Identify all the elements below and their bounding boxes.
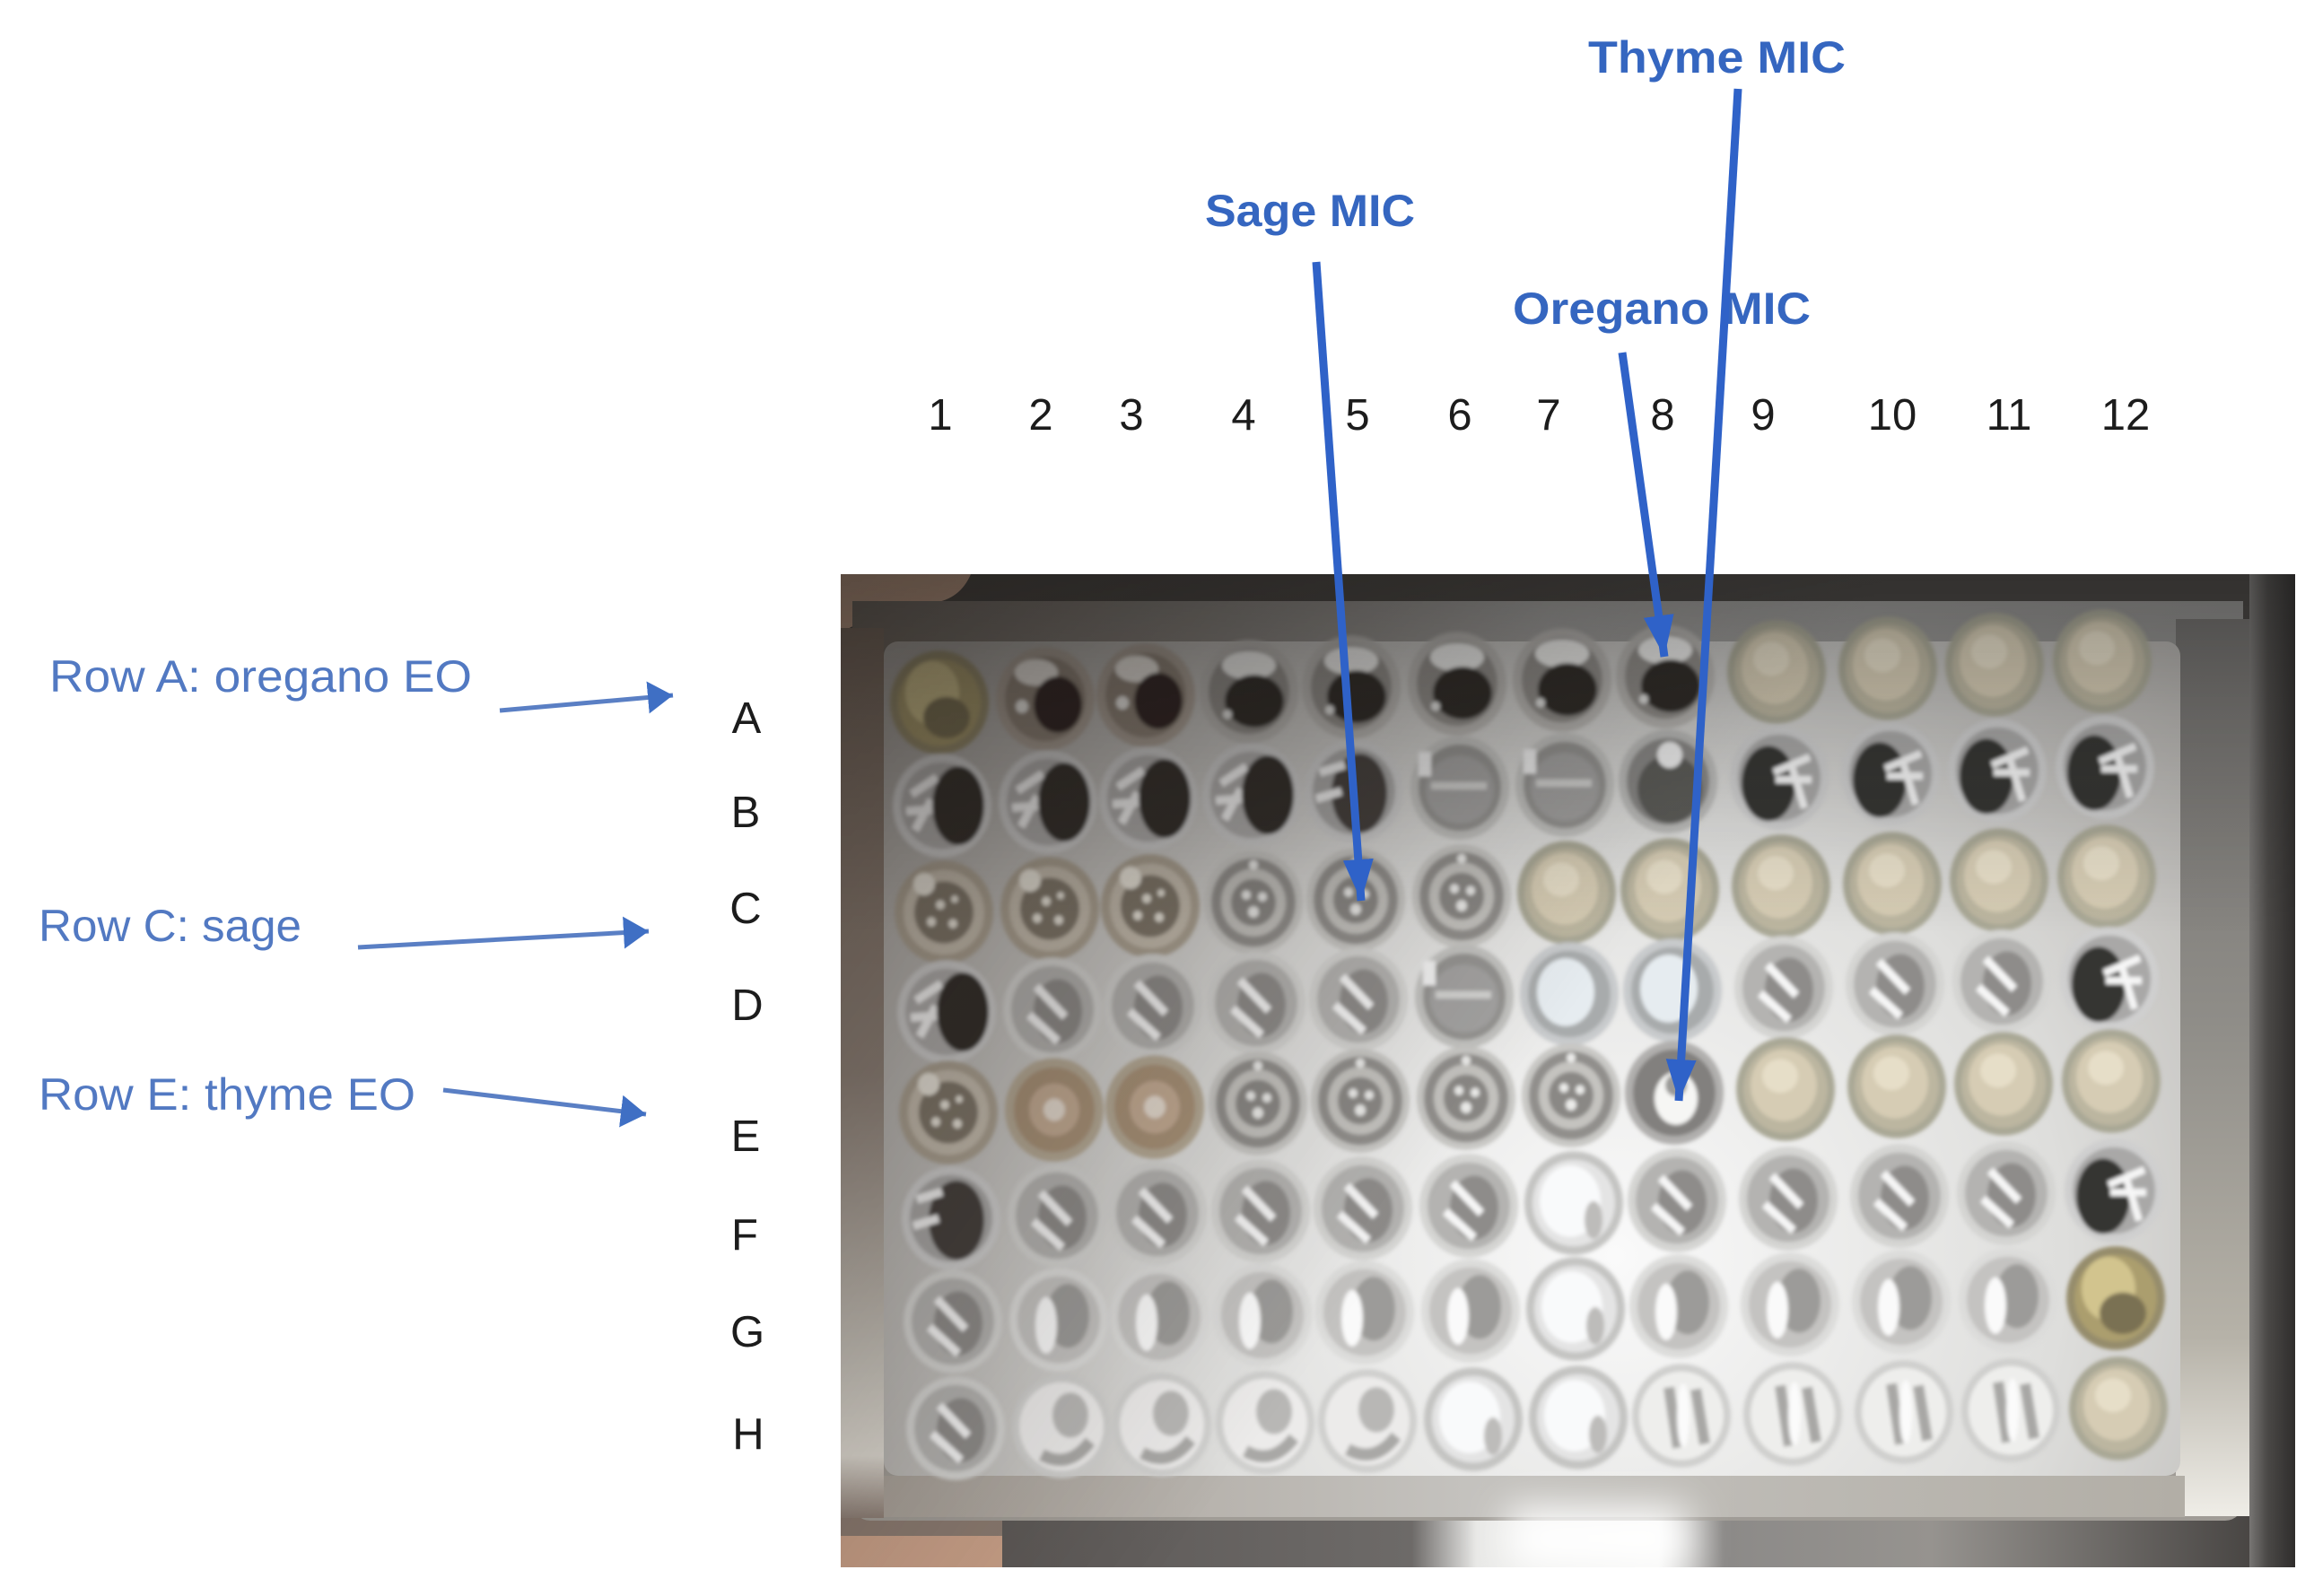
row C wells: sage <box>895 824 2156 964</box>
row G wells <box>904 1246 2165 1374</box>
column numbers 1 to 12: 7 <box>1536 391 1561 440</box>
column numbers 1 to 12: 2 <box>1028 391 1053 440</box>
row letters A to H: F <box>731 1211 758 1260</box>
row letters A to H: D <box>731 981 764 1030</box>
row letters A to H <box>729 694 764 1459</box>
wells <box>890 609 2168 1480</box>
arrow: Oregano MIC <box>1622 353 1664 657</box>
row letters A to H: G <box>730 1308 764 1356</box>
label: Row C sage: Row C: sage <box>39 901 301 951</box>
arrow: Row C <box>358 931 649 947</box>
column numbers 1 to 12: 10 <box>1868 391 1917 440</box>
row letters A to H: C <box>729 885 762 933</box>
arrow: Thyme MIC <box>1679 89 1738 1101</box>
row H wells <box>906 1356 2168 1480</box>
column numbers 1 to 12: 1 <box>928 391 953 440</box>
photo base and bench <box>841 574 2295 1567</box>
column numbers 1 to 12: 3 <box>1119 391 1144 440</box>
lighting shade over upper left of plate <box>841 574 1717 1567</box>
arrow: Sage MIC <box>1316 262 1361 901</box>
label: Row A oregano EO: Row A: oregano EO <box>49 651 472 702</box>
label: Row E thyme EO: Row E: thyme EO <box>39 1069 415 1120</box>
column numbers 1 to 12: 6 <box>1447 391 1472 440</box>
lighting shade along top of plate <box>841 574 2295 892</box>
plate body <box>841 574 2295 1570</box>
row letters A to H: A <box>732 694 762 743</box>
column numbers 1 to 12: 12 <box>2101 391 2150 440</box>
row D wells <box>897 927 2159 1064</box>
arrow: Row A <box>500 695 673 711</box>
row letters A to H: E <box>731 1112 760 1161</box>
label: Thyme MIC: Thyme MIC <box>1588 32 1846 83</box>
row E wells: thyme <box>899 1029 2161 1164</box>
arrow: Row E <box>443 1090 646 1114</box>
label: Oregano MIC: Oregano MIC <box>1513 283 1811 334</box>
column numbers 1 to 12: 8 <box>1650 391 1675 440</box>
column numbers 1 to 12: 4 <box>1231 391 1256 440</box>
column numbers 1 to 12: 11 <box>1987 391 2031 440</box>
column numbers 1 to 12: 9 <box>1751 391 1776 440</box>
row B wells <box>893 715 2154 858</box>
finger at top left <box>841 574 971 632</box>
column numbers 1 to 12 <box>928 391 2150 440</box>
label: Sage MIC: Sage MIC <box>1205 186 1415 236</box>
row A wells: oregano <box>890 609 2152 754</box>
row F wells <box>902 1138 2163 1270</box>
photo: 96-well microplate <box>841 574 2295 1570</box>
row letters A to H: H <box>732 1410 764 1459</box>
column numbers 1 to 12: 5 <box>1345 391 1370 440</box>
row letters A to H: B <box>731 789 760 837</box>
